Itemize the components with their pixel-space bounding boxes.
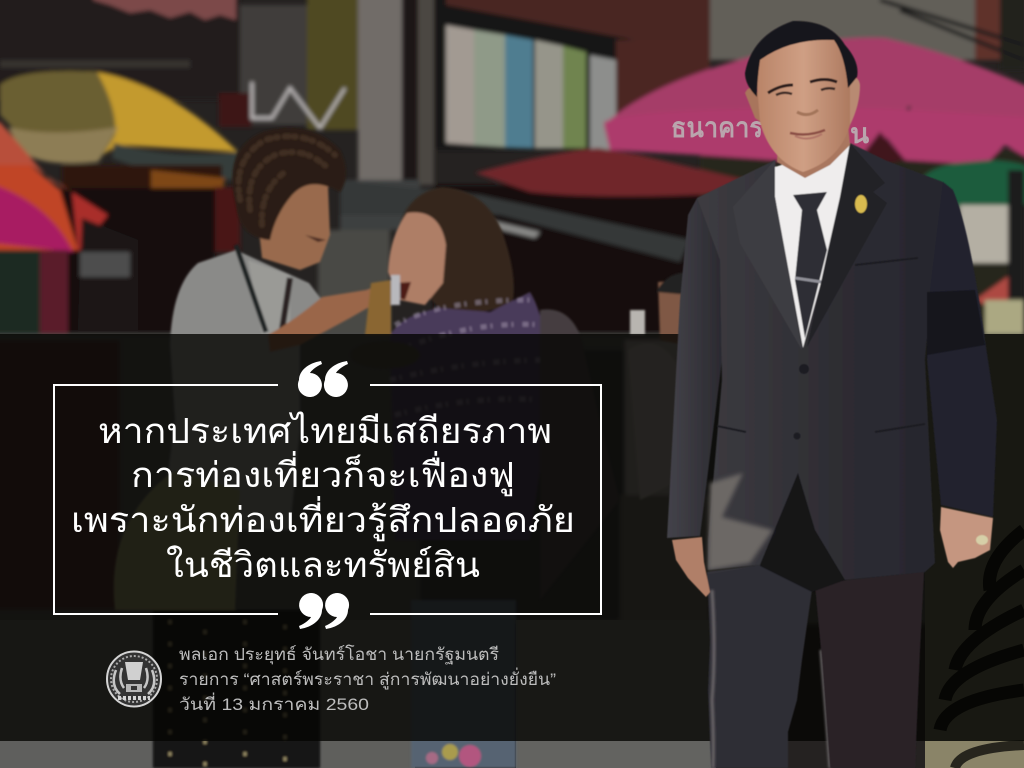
neck — [777, 125, 850, 178]
quote text: การท่องเที่ยวก็จะเฟื่องฟู — [131, 451, 515, 496]
tie bar — [795, 278, 822, 282]
ring — [976, 535, 988, 545]
background white LAV sign — [252, 82, 345, 128]
pavement and right-side patterned object — [0, 334, 1024, 768]
attribution text: วันที่ 13 มกราคม 2560 — [179, 692, 369, 714]
eyebrows — [768, 80, 837, 93]
background left shop front — [0, 0, 358, 130]
shirt — [775, 143, 850, 348]
background posters — [446, 25, 616, 150]
hair — [745, 21, 858, 97]
left lapel — [733, 160, 802, 350]
dark translucent band — [0, 334, 1024, 741]
inner dark shadow at jacket opening — [760, 473, 845, 592]
trousers left leg — [707, 565, 812, 768]
quote text: หากประเทศไทยมีเสถียรภาพ — [98, 411, 552, 451]
jacket buttons — [794, 364, 809, 440]
right ear — [845, 78, 860, 125]
attribution text: รายการ “ศาสตร์พระราชา สู่การพัฒนาอย่างยั่งยืน” — [179, 667, 556, 690]
government seal icon — [107, 652, 161, 706]
attribution text — [179, 644, 556, 714]
right sleeve — [927, 182, 997, 517]
gold pin — [855, 195, 867, 213]
woman eating noodles — [350, 187, 550, 540]
icon: closing quotation mark — [299, 593, 349, 629]
suit jacket body — [697, 143, 953, 580]
background upper right building — [710, 0, 1024, 70]
quote frame — [54, 385, 601, 614]
left ear — [745, 88, 765, 125]
man in dark suit, prime minister — [667, 21, 997, 768]
necktie — [793, 192, 827, 338]
background red building — [434, 0, 710, 150]
background red canopy centre — [475, 148, 745, 196]
pockets — [717, 258, 925, 432]
background yellow umbrella — [0, 71, 240, 334]
bag and skirts — [114, 470, 516, 768]
face — [757, 36, 850, 172]
nose — [797, 110, 818, 115]
right hand — [940, 507, 993, 568]
background red-pink umbrella — [0, 122, 138, 340]
lower street stall — [0, 334, 1024, 645]
left hand — [672, 537, 710, 597]
trouser highlights — [712, 590, 830, 768]
umbrella lettering: ธนาคาร — [671, 112, 763, 143]
right lapel — [807, 143, 887, 347]
eyes — [776, 88, 835, 95]
umbrella lettering: น — [850, 118, 869, 149]
background right side behind man — [700, 150, 1024, 340]
quote text — [71, 411, 575, 585]
background person in white — [540, 273, 690, 600]
man in grey T-shirt — [160, 128, 380, 530]
left sleeve — [667, 198, 722, 538]
icon: opening quotation mark — [298, 361, 348, 397]
umbrella lettering — [671, 112, 869, 149]
mourning armband — [927, 290, 985, 355]
lit patch on jacket — [708, 473, 773, 570]
mouth — [790, 130, 825, 134]
trousers right leg — [815, 572, 924, 768]
background centre street — [318, 180, 724, 340]
quote text: ในชีวิตและทรัพย์สิน — [166, 545, 480, 585]
quote text: เพราะนักท่องเที่ยวรู้สึกปลอดภัย — [71, 496, 575, 541]
attribution text: พลเอก ประยุทธ์ จันทร์โอชา นายกรัฐมนตรี — [179, 644, 499, 665]
background concrete pillar — [358, 0, 434, 185]
background pink bank umbrella — [604, 38, 1024, 170]
